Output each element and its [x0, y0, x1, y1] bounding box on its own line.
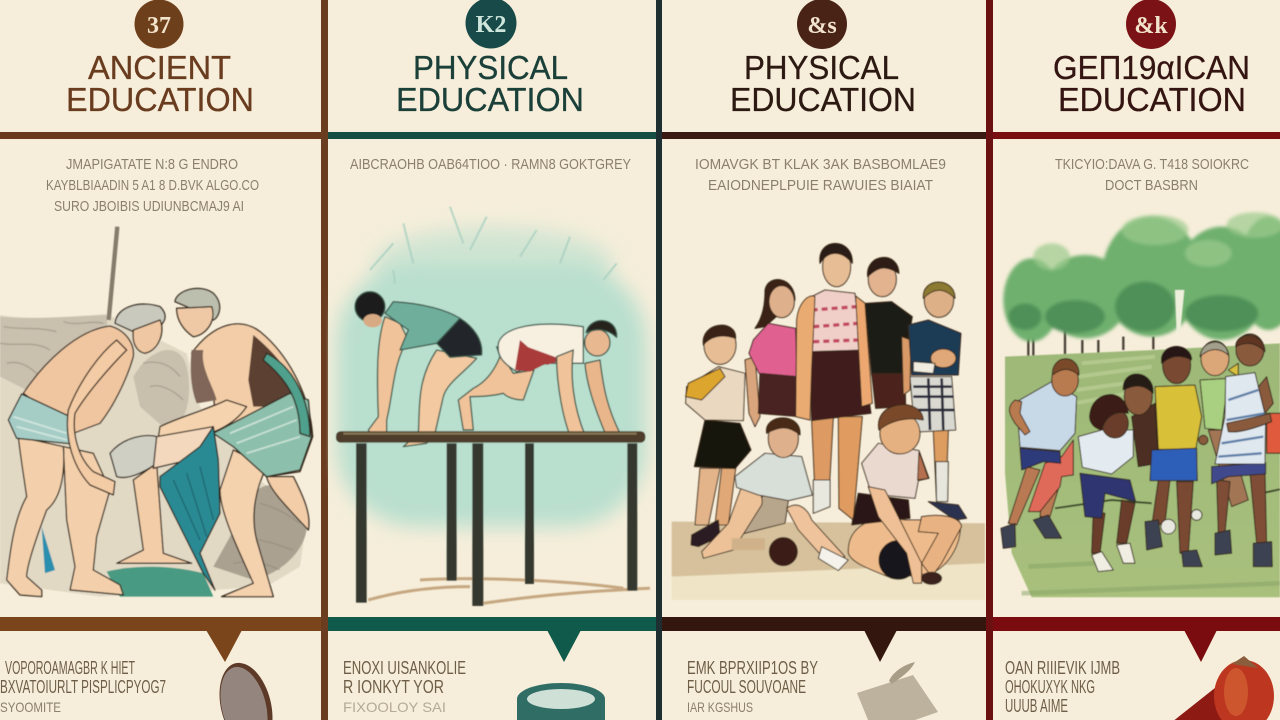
tree trunks [1028, 323, 1153, 357]
seated boy left [702, 418, 848, 571]
text block: footer: EMK BPRXIIP1OS BY [687, 658, 818, 678]
text block: ancient footer: BXVATOIURLT PISPLICPYOG7 [0, 677, 166, 697]
icon: ancient badge [134, 0, 184, 48]
footer band [0, 617, 321, 662]
text block: ancient description: SURO JBOIBIS UDIUNBCMAJ9 AI [54, 198, 244, 215]
panel: physical education one [328, 0, 656, 720]
icon: red fruit and wedge [1172, 656, 1274, 720]
icon: brown badge [797, 0, 847, 49]
text block: ancient description [46, 156, 259, 215]
seated boy right [848, 405, 962, 584]
footer band [328, 617, 656, 662]
footer band [662, 617, 986, 662]
heading: garbled american education: GEΠ19αICAN [1053, 49, 1250, 86]
heading: physical education: EDUCATION [730, 81, 916, 118]
bar legs [356, 443, 637, 606]
mint wash [337, 227, 647, 527]
text block: physical footer: R IONKYT YOR [343, 677, 444, 697]
heading: physical education [396, 49, 584, 118]
vertical divider two [656, 0, 662, 720]
text block: footer [1005, 658, 1120, 716]
front gymnast [355, 292, 482, 447]
header rule [993, 132, 1280, 139]
icon: ancient badge: 37 [147, 13, 171, 39]
text block: description [695, 156, 946, 194]
footer band [993, 617, 1280, 662]
vertical divider three [986, 0, 993, 720]
icon: brown badge: &s [807, 13, 837, 39]
panel: physical education two [662, 0, 986, 720]
icon: teal badge [466, 0, 516, 48]
ground [672, 522, 985, 578]
ground patch [107, 567, 213, 597]
crouching child in white [1078, 395, 1136, 572]
bar [336, 431, 645, 443]
text block: physical description: AIBCRAOHB OAB64TIOO · RAMN8 GOKTGREY [350, 156, 631, 173]
rear gymnast [458, 321, 620, 440]
child with green shirt [1200, 341, 1248, 507]
heading: garbled american education [1053, 49, 1250, 118]
text block: ancient description: JMAPIGATATE N:8 G ENDRO [66, 156, 238, 173]
foliage strokes [370, 207, 617, 283]
header rule [662, 132, 986, 139]
text block: ancient description: KAYBLBIAADIN 5 A1 8 D.BVK ALGO.CO [46, 177, 259, 194]
heading: physical education: EDUCATION [396, 81, 584, 118]
icon: red badge [1126, 0, 1176, 49]
text block: footer: OAN RIIIEVIK IJMB [1005, 658, 1120, 678]
heading: physical education: PHYSICAL [413, 49, 568, 86]
child with yellow vest [1145, 346, 1202, 567]
text block: physical footer [343, 658, 466, 715]
text block: ancient footer [0, 658, 166, 715]
heading: physical education [730, 49, 916, 118]
tree canopy [1003, 212, 1280, 342]
text block: footer: UUUB AIME [1005, 696, 1068, 716]
header rule [328, 132, 656, 139]
vertical divider one [321, 0, 328, 720]
text block: description: DOCT BASBRN [1105, 177, 1198, 194]
text block: footer: FUCOUL SOUVOANE [687, 677, 806, 697]
icon: red badge: &k [1134, 13, 1168, 39]
front row children [686, 325, 751, 547]
text block: description: EAIODNEPLPUIE RAWUIES BIAIAT [708, 177, 933, 194]
child behind centre [1123, 374, 1158, 467]
sky gap [1175, 290, 1184, 333]
text block: footer: OHOKUXYK NKG [1005, 677, 1095, 697]
child with white shirt left [1001, 359, 1079, 548]
ground shadows [368, 579, 650, 603]
text block: physical footer: ENOXI UISANKOLIE [343, 658, 466, 678]
text block: description: IOMAVGK BT KLAK 3AK BASBOMLAE9 [695, 156, 946, 173]
text block: ancient footer: VOPOROAMAGBR K HIET [5, 658, 135, 678]
figures [7, 288, 313, 597]
panel: fourth education [993, 0, 1280, 720]
child on right [1199, 334, 1280, 567]
icon: slate and quill [857, 662, 938, 720]
text block: ancient footer: SYOOMITE [0, 699, 61, 715]
icon: teal cylinder [517, 683, 605, 720]
illustration: two ancient wrestlers [0, 227, 313, 597]
background rocks [0, 314, 307, 597]
heading: physical education: PHYSICAL [744, 49, 899, 86]
text block: footer [687, 658, 818, 715]
blue stick [42, 527, 55, 573]
text block: physical footer: FIXOOLOY SAI [343, 699, 446, 715]
heading: garbled american education: EDUCATION [1058, 81, 1246, 118]
heading: ancient education: ANCIENT [88, 49, 231, 86]
heading: ancient education [66, 49, 254, 118]
icon: teal badge: K2 [476, 12, 506, 38]
icon: bronze disc [211, 657, 281, 720]
tall central child [796, 243, 872, 520]
rock hatching [0, 322, 300, 570]
heading: ancient education: EDUCATION [66, 81, 254, 118]
text block: footer: IAR KGSHUS [687, 699, 753, 715]
cloth stripes [13, 407, 300, 453]
illustration: group of children [672, 243, 985, 600]
text block: description [1055, 156, 1249, 194]
grass [1005, 343, 1280, 597]
back row children [745, 257, 967, 520]
header rule [0, 132, 321, 139]
illustration: gymnasts on bar [336, 207, 650, 606]
pole [109, 227, 117, 320]
panel: ancient education [0, 0, 321, 720]
illustration: children on field [1001, 212, 1280, 597]
